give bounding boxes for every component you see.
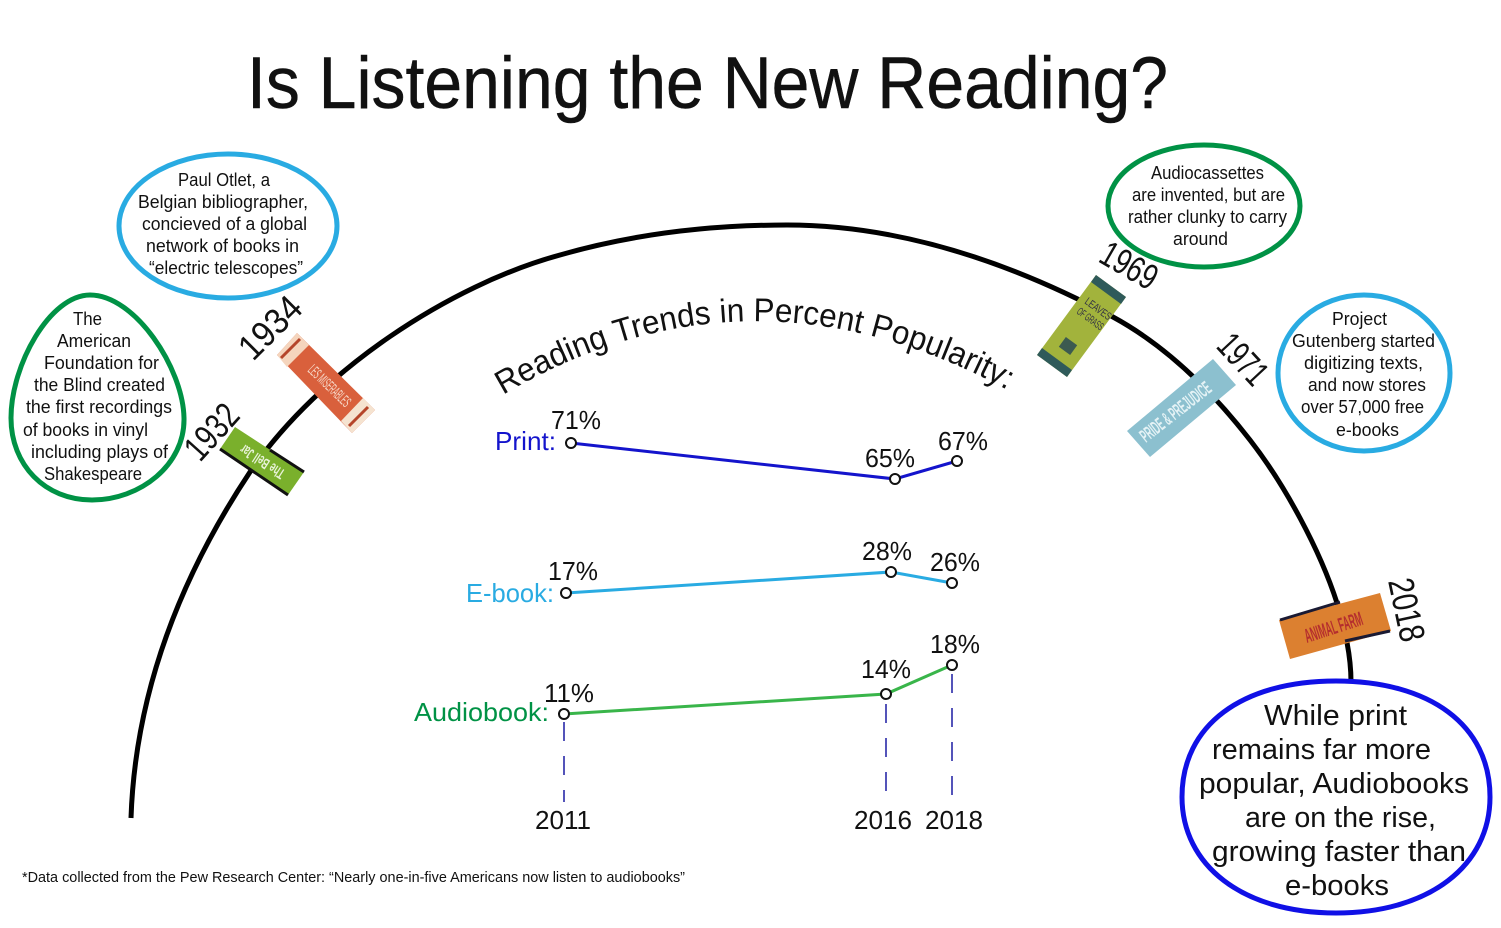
line: audiobook: 11% xyxy=(544,678,594,708)
year labels: 1969 xyxy=(1093,232,1165,298)
book: 1932 The Bell Jar xyxy=(220,427,304,495)
callout: 1932: The xyxy=(73,309,102,329)
callout: 1932: the Blind created xyxy=(34,375,165,395)
callout: 1932 xyxy=(11,295,184,500)
line: e-book: 26% xyxy=(930,547,980,577)
callout: 1932: Foundation for xyxy=(44,353,159,373)
callout: 1932: the first recordings xyxy=(26,397,172,417)
x-axis years: 2018 xyxy=(925,805,983,835)
year labels: 2018 xyxy=(1380,574,1434,645)
callout: 1934 xyxy=(119,154,337,298)
line: print: 67% xyxy=(938,426,988,456)
callout: conclusion: e-books xyxy=(1285,870,1389,902)
line: print xyxy=(495,405,988,484)
line: print: Print: xyxy=(495,426,556,456)
callout: 1971: and now stores xyxy=(1308,375,1426,395)
callout: 1934: network of books in xyxy=(146,236,299,256)
callout: conclusion: While print xyxy=(1264,700,1407,732)
year labels: 1934 xyxy=(230,287,310,368)
book: 1969 Leaves of Grass xyxy=(1037,275,1126,377)
callout: 1934: Paul Otlet, a xyxy=(178,170,271,190)
callout: 1971: over 57,000 free xyxy=(1301,397,1424,417)
year labels: 1971 xyxy=(1209,324,1277,393)
callout: 1971: Project xyxy=(1332,309,1387,329)
callout: 1932: including plays of xyxy=(31,442,169,462)
callout: 1932: of books in vinyl xyxy=(23,420,148,440)
callout: 1934: concieved of a global xyxy=(142,214,307,234)
callout: conclusion: popular, Audiobooks xyxy=(1199,768,1469,800)
line: print: 71% xyxy=(551,405,601,435)
x-axis years: 2016 xyxy=(854,805,912,835)
callout: 1971 xyxy=(1278,295,1450,451)
title: Is Listening the New Reading? xyxy=(247,43,1168,124)
book: 2018 Animal Farm xyxy=(1279,593,1391,659)
callout: conclusion: remains far more xyxy=(1212,734,1431,766)
source note: *Data collected from the Pew Research Center: “Nearly one-in-five Americans now listen to audiobooks” xyxy=(22,870,685,886)
callout: 1969: are invented, but are xyxy=(1132,185,1285,205)
callout: conclusion: growing faster than xyxy=(1212,836,1466,868)
callout: conclusion: are on the rise, xyxy=(1245,802,1436,834)
line: e-book: 17% xyxy=(548,556,598,586)
x-axis years: 2011 xyxy=(535,805,591,835)
year labels xyxy=(175,232,1434,645)
x-axis years xyxy=(535,805,983,835)
callout: 1969: rather clunky to carry xyxy=(1128,207,1287,227)
line: print: 65% xyxy=(865,443,915,473)
line: audiobook: 14% xyxy=(861,654,911,684)
callout: 1934: “electric telescopes” xyxy=(149,258,303,278)
year labels: 1932 xyxy=(175,395,247,468)
guide dashes xyxy=(564,674,952,802)
book: 1971 Pride and Prejudice xyxy=(1127,359,1236,457)
line: audiobook: 18% xyxy=(930,629,980,659)
line: audiobook xyxy=(414,629,980,727)
line: e-book xyxy=(466,536,980,608)
callout: 1932: Shakespeare xyxy=(44,464,142,484)
callout: 1969 xyxy=(1108,145,1300,267)
book: 1971 Pride and Prejudice: PRIDE & PREJUDICE xyxy=(1136,378,1216,447)
line: e-book: 28% xyxy=(862,536,912,566)
book: 1969 Leaves of Grass: OF GRASS xyxy=(1074,306,1106,333)
book: 1932 The Bell Jar: The Bell Jar xyxy=(237,440,288,482)
book: 1969 Leaves of Grass: LEAVES xyxy=(1082,296,1114,323)
callout: 1934: Belgian bibliographer, xyxy=(138,192,308,212)
timeline arc xyxy=(131,225,1351,818)
callout: 1971: e-books xyxy=(1336,420,1399,440)
callout: 1932: American xyxy=(57,331,131,351)
callout: 1969: around xyxy=(1173,229,1228,249)
callout: 1971: digitizing texts, xyxy=(1304,353,1423,373)
line: e-book: E-book: xyxy=(466,578,554,608)
callout: conclusion xyxy=(1182,681,1490,913)
chart heading: Reading Trends in Percent Popularity: xyxy=(494,298,1013,394)
callout: 1969: Audiocassettes xyxy=(1151,163,1264,183)
callout: 1971: Gutenberg started xyxy=(1292,331,1435,351)
book: 2018 Animal Farm: ANIMAL FARM xyxy=(1302,608,1366,648)
book: 1934 Les Miserables xyxy=(277,333,375,433)
book: 1934 Les Miserables: LES MISERABLES xyxy=(304,362,354,411)
line: audiobook: Audiobook: xyxy=(414,697,549,727)
